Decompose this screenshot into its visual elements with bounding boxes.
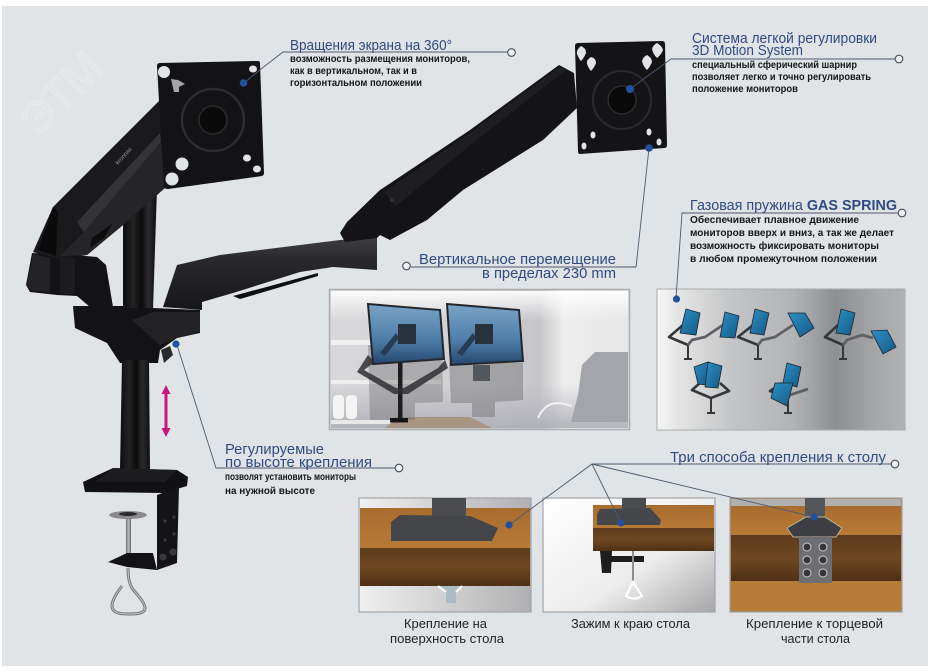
stand (398, 357, 402, 419)
right lower arm (163, 237, 377, 310)
callout: vertical movement (403, 144, 653, 282)
callout: height adjustable mount: Регулируемые (225, 441, 324, 458)
ghost monitors (368, 345, 443, 420)
callout: vertical movement: Вертикальное перемещение (419, 251, 616, 268)
callout: gas spring: Газовая пружина GAS SPRING (690, 197, 897, 214)
caption: surface mount: Крепление на (404, 617, 487, 631)
clamp hook (112, 568, 145, 614)
callout: gas spring: мониторов вверх и вниз, а так же делает (690, 228, 894, 239)
clamp (600, 551, 612, 573)
right plate (575, 41, 667, 154)
callout: height adjustable mount: на нужной высоте (225, 486, 315, 497)
callout: 3D Motion System (626, 30, 903, 95)
front monitors (368, 304, 444, 364)
figures: right arms (688, 325, 873, 398)
lower pole (120, 360, 150, 470)
caption: surface mount (390, 617, 504, 646)
left base joints (26, 253, 113, 307)
caption: grommet mount: Крепление к торцевой (746, 617, 883, 631)
callout: screen rotation: как в вертикальном, так и в (290, 66, 417, 77)
vases (333, 395, 344, 419)
callout: screen rotation: Вращения экрана на 360° (290, 37, 452, 54)
bracket holes (160, 515, 176, 560)
right lower arm underside (233, 273, 318, 299)
photo panel: grommet mount (730, 498, 902, 612)
callout: three mounting methods (505, 449, 899, 529)
left arm: kronnax (115, 146, 134, 166)
left plate (157, 61, 264, 189)
callout: screen rotation: возможность размещения мониторов, (290, 54, 470, 65)
desk (385, 417, 492, 428)
callout: screen rotation: горизонтальном положении (290, 78, 422, 89)
callout: height adjustable mount (172, 340, 403, 497)
photo panel: surface mount (359, 498, 531, 612)
caption: grommet mount: части стола (781, 632, 850, 646)
figures: screens (680, 309, 896, 406)
caption: edge clamp: Зажим к краю стола (571, 617, 690, 631)
chair (571, 352, 628, 422)
clamp lower plate (108, 553, 157, 570)
callout: gas spring (673, 197, 906, 303)
callout: gas spring: в любом промежуточном положении (690, 253, 877, 265)
upper pole (123, 188, 157, 310)
clamp top (83, 468, 188, 493)
wing bolt (438, 586, 462, 603)
left arm (33, 100, 166, 258)
photo panel: vertical movement (330, 290, 630, 430)
collar (73, 306, 200, 363)
clamp bracket (157, 487, 179, 570)
height arrow (162, 385, 170, 437)
clamp screw (126, 516, 131, 556)
right upper arm (340, 65, 577, 242)
figures: stands and left arms (669, 325, 847, 413)
photo panel: edge clamp (543, 498, 715, 612)
callout: height adjustable mount: позволят установить мониторы (225, 472, 356, 483)
callout: height adjustable mount: по высоте крепления (225, 454, 372, 471)
mount base (432, 498, 466, 518)
callout: three mounting methods: Три способа крепления к столу (670, 449, 886, 466)
caption: grommet mount (746, 617, 883, 646)
product: dual monitor arm (26, 41, 667, 614)
callout: vertical movement: в пределах 230 mm (482, 265, 616, 282)
callout: 3D Motion System: специальный сферический шарнир (692, 59, 857, 71)
watermark: ЭТМ (10, 43, 112, 145)
callout: gas spring: возможность фиксировать мониторы (690, 240, 879, 252)
callout: 3D Motion System: 3D Motion System (692, 42, 803, 59)
callout: 3D Motion System: Система легкой регулировки (692, 30, 877, 47)
caption: surface mount: поверхность стола (390, 632, 504, 646)
screws (803, 543, 827, 577)
callout: gas spring: Обеспечивает плавное движение (690, 214, 859, 226)
callout: screen rotation (240, 37, 515, 89)
callout: 3D Motion System: положение мониторов (692, 84, 798, 95)
callout: 3D Motion System: позволяет легко и точно регулировать (692, 72, 871, 83)
photo panel: gas spring positions (657, 289, 905, 430)
locking knob (161, 346, 173, 363)
